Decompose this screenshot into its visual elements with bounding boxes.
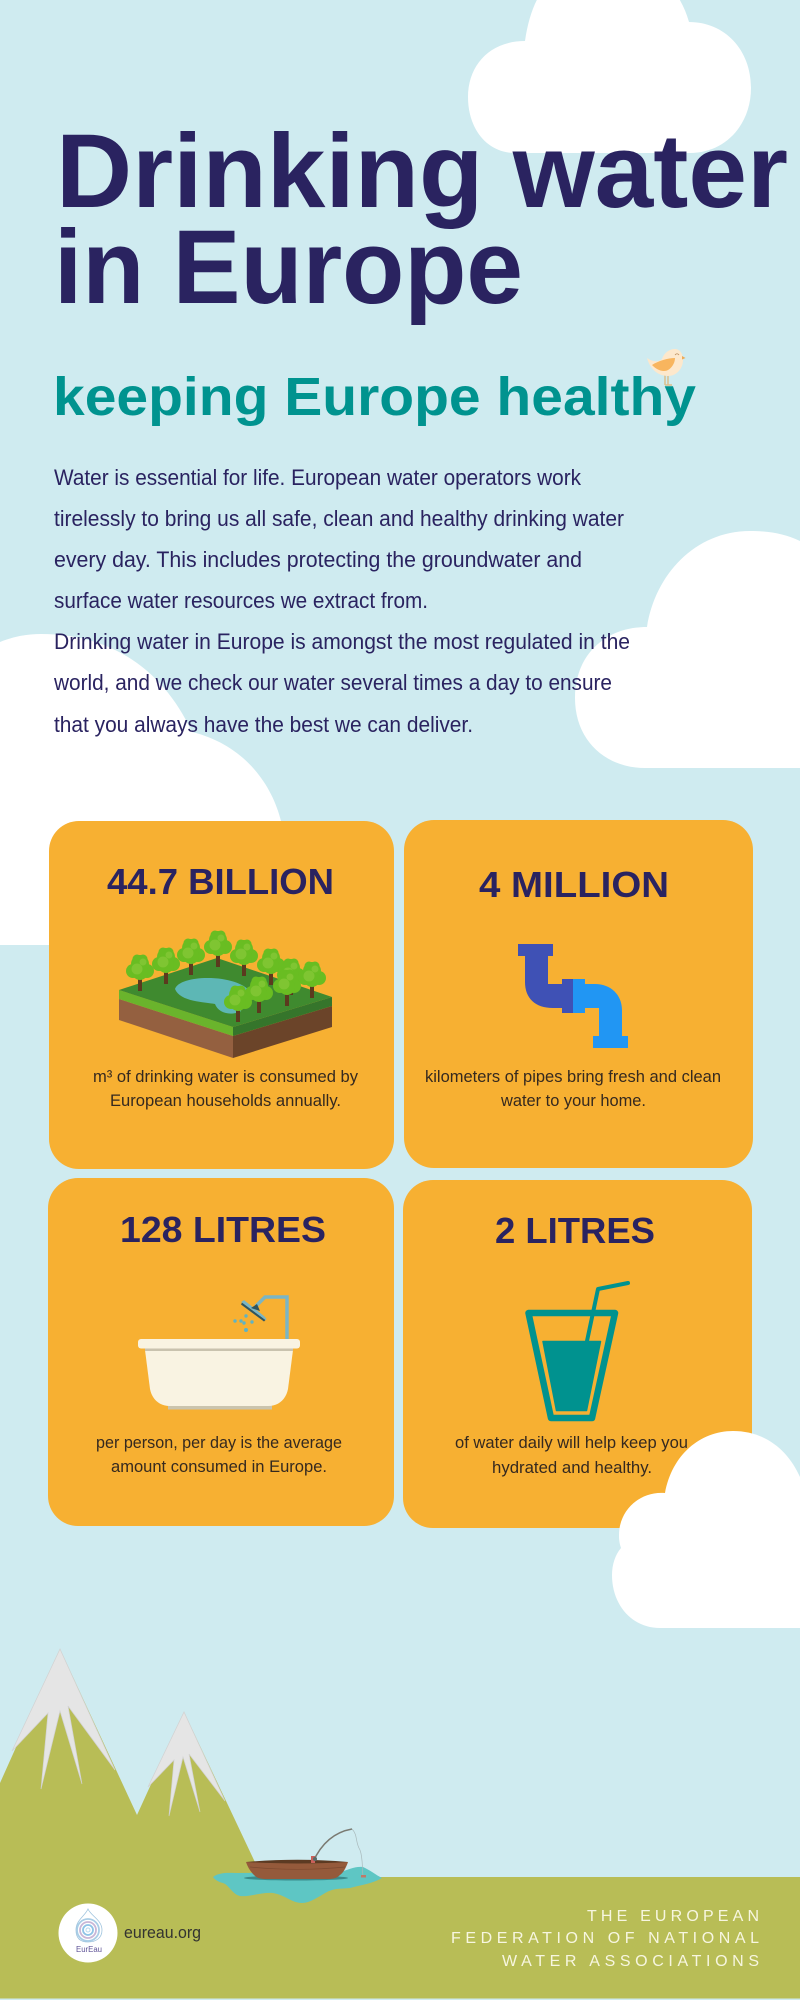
intro paragraph: world, and we check our water several times a day to ensure <box>53 670 612 695</box>
title: Drinking water <box>56 113 788 230</box>
logo: EurEau <box>58 1904 118 1962</box>
text: 4 million caption: water to your home. <box>500 1091 646 1110</box>
footer text: FEDERATION OF NATIONAL <box>451 1930 759 1947</box>
text: 128 litres caption: per person, per day is the average <box>96 1433 342 1452</box>
footer text: THE EUROPEAN <box>587 1908 759 1925</box>
intro paragraph: tirelessly to bring us all safe, clean and healthy drinking water <box>54 506 624 531</box>
text: 2 litres caption: hydrated and healthy. <box>492 1458 652 1477</box>
text: 44.7 billion caption: European households annually. <box>110 1091 341 1110</box>
heading: 128 litres: 128 LITRES <box>120 1209 326 1250</box>
cloud: lower right <box>612 1431 800 1628</box>
text: 4 million caption <box>425 1067 721 1110</box>
intro paragraph: that you always have the best we can deliver. <box>54 712 473 737</box>
cloud: middle right <box>575 531 800 768</box>
intro paragraph: surface water resources we extract from. <box>54 588 428 613</box>
panel: 4 million <box>404 820 753 1168</box>
panel: 44.7 billion <box>49 821 394 1169</box>
logo wordmark: EurEau <box>76 1945 102 1954</box>
text: 128 litres caption: amount consumed in Europe. <box>111 1457 327 1476</box>
icon: land with pond and trees <box>119 930 332 1058</box>
heading: 4 million: 4 MILLION <box>479 864 669 905</box>
website link: eureau.org <box>124 1923 201 1942</box>
text: 2 litres caption: of water daily will help keep you <box>455 1433 688 1452</box>
cloud: top right <box>468 0 751 153</box>
heading: 2 litres: 2 LITRES <box>495 1210 655 1251</box>
text: 44.7 billion caption <box>93 1067 358 1110</box>
intro paragraph: every day. This includes protecting the groundwater and <box>54 547 582 572</box>
intro paragraph: Water is essential for life. European water operators work <box>54 465 582 490</box>
icon: glass with straw <box>528 1283 628 1418</box>
footer text <box>451 1908 759 1970</box>
title <box>54 113 788 326</box>
panel: 2 litres <box>403 1180 752 1528</box>
text: 44.7 billion caption: m³ of drinking water is consumed by <box>93 1067 358 1086</box>
icon: water drop with rings <box>76 1909 102 1942</box>
text: 128 litres caption <box>96 1433 342 1476</box>
boat with fishing rod <box>244 1829 366 1880</box>
panel: 128 litres <box>48 1178 394 1526</box>
ground and mountains <box>0 1649 800 1998</box>
intro paragraph <box>53 465 630 737</box>
heading: 44.7 billion: 44.7 BILLION <box>107 861 334 902</box>
lake <box>213 1867 382 1903</box>
text: 4 million caption: kilometers of pipes bring fresh and clean <box>425 1067 721 1086</box>
intro paragraph: Drinking water in Europe is amongst the most regulated in the <box>54 629 630 654</box>
cloud: middle left <box>0 634 290 945</box>
subtitle: keeping Europe healthy <box>53 367 696 427</box>
footer text: WATER ASSOCIATIONS <box>502 1953 759 1970</box>
title: in Europe <box>54 209 523 326</box>
snow cap: right mountain <box>148 1712 225 1816</box>
text: 2 litres caption <box>455 1433 688 1477</box>
icon: bird <box>647 349 686 385</box>
icon: pipes <box>518 944 628 1048</box>
icon: bathtub with shower <box>138 1297 300 1410</box>
snow cap: left mountain <box>12 1649 115 1789</box>
